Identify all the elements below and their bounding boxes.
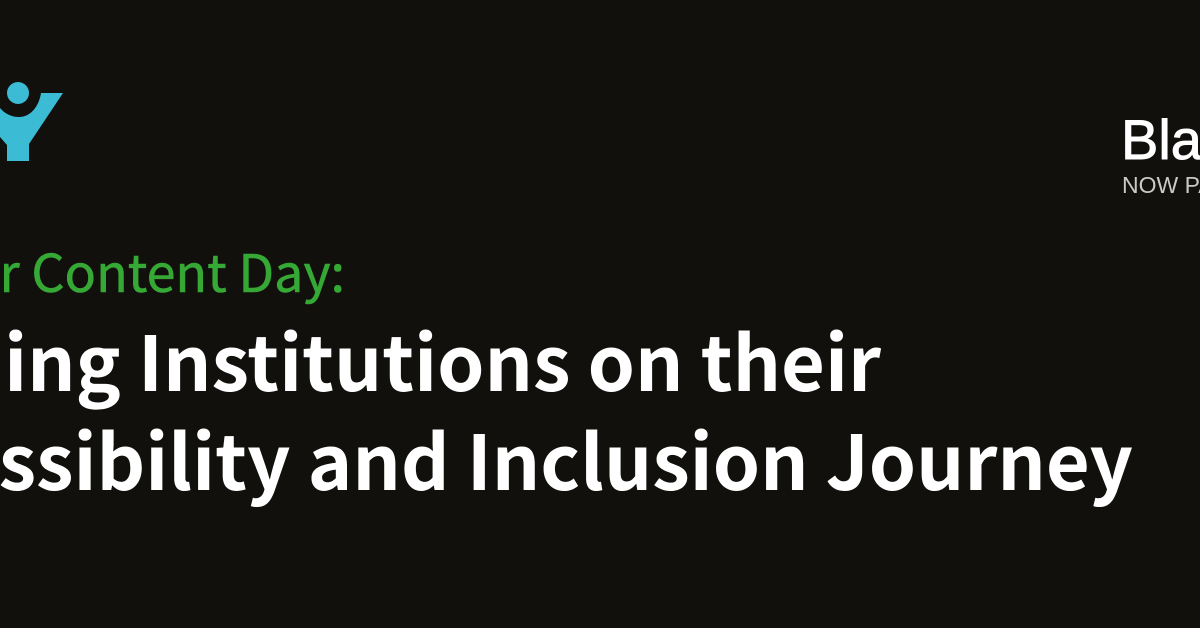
logo: Blackboard wordmark [1121,110,1200,198]
icon: teal figure logo [0,82,63,161]
title: white heading [0,321,1133,512]
